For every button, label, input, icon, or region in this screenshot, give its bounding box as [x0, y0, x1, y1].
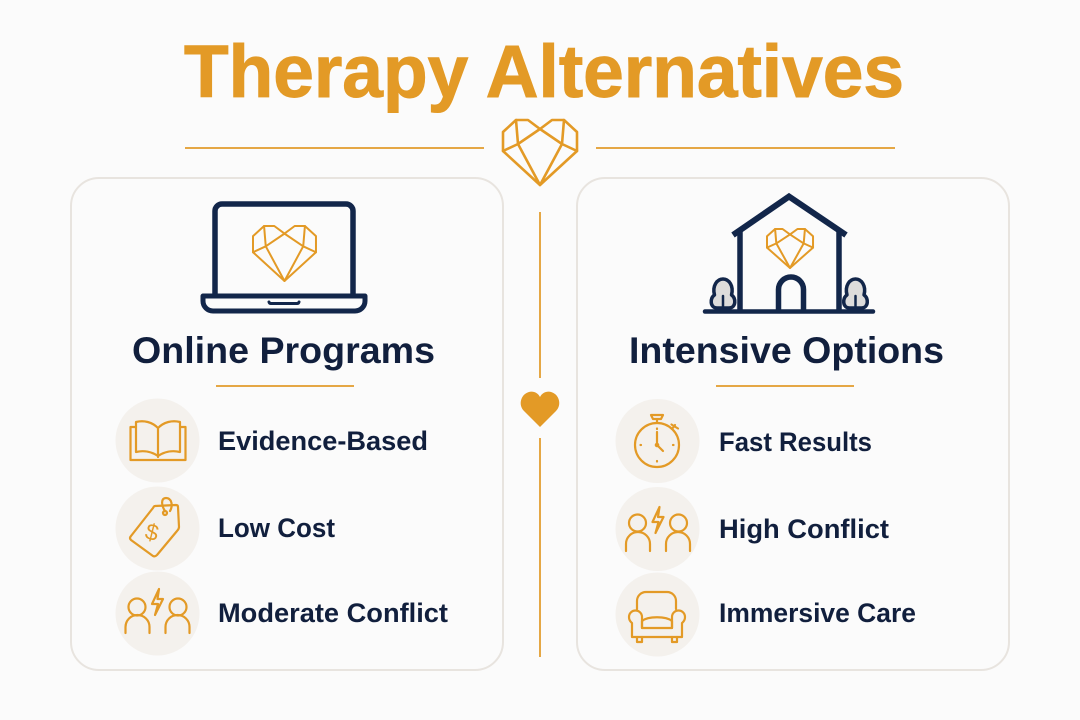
item: high conflict	[616, 487, 889, 571]
panel: intensive options	[577, 178, 1009, 670]
item: evidence-based: Evidence-Based	[218, 426, 428, 456]
icon: left tree	[711, 279, 735, 309]
icon: open book	[130, 421, 186, 460]
item: low cost	[116, 486, 335, 570]
heading: intensive options: Intensive Options	[629, 330, 944, 371]
item: fast results: Fast Results	[719, 427, 872, 457]
panel: online programs	[71, 178, 503, 670]
icon: house with heart and trees	[705, 196, 873, 312]
icon: stopwatch	[635, 415, 679, 467]
icon: armchair	[629, 592, 685, 642]
item: fast results	[616, 399, 872, 483]
item: immersive care	[616, 572, 916, 656]
icon: two people with lightning	[126, 589, 190, 633]
item: low cost: Low Cost	[218, 513, 335, 543]
center divider	[521, 212, 559, 657]
item: moderate conflict: Moderate Conflict	[218, 598, 448, 628]
heading: online programs: Online Programs	[132, 330, 435, 371]
item: moderate conflict	[116, 572, 448, 656]
title: Therapy Alternatives	[184, 30, 904, 113]
icon: price tag: $	[143, 518, 162, 546]
item: immersive care: Immersive Care	[719, 598, 916, 628]
icon: solid heart	[521, 392, 559, 427]
title divider with heart	[185, 120, 895, 185]
icon: right tree	[844, 279, 867, 309]
item: high conflict: High Conflict	[719, 514, 889, 544]
icon: laptop with heart	[203, 204, 365, 311]
item: evidence-based	[116, 398, 428, 482]
icon: two people with lightning	[626, 507, 690, 551]
icon: price tag	[130, 498, 179, 556]
